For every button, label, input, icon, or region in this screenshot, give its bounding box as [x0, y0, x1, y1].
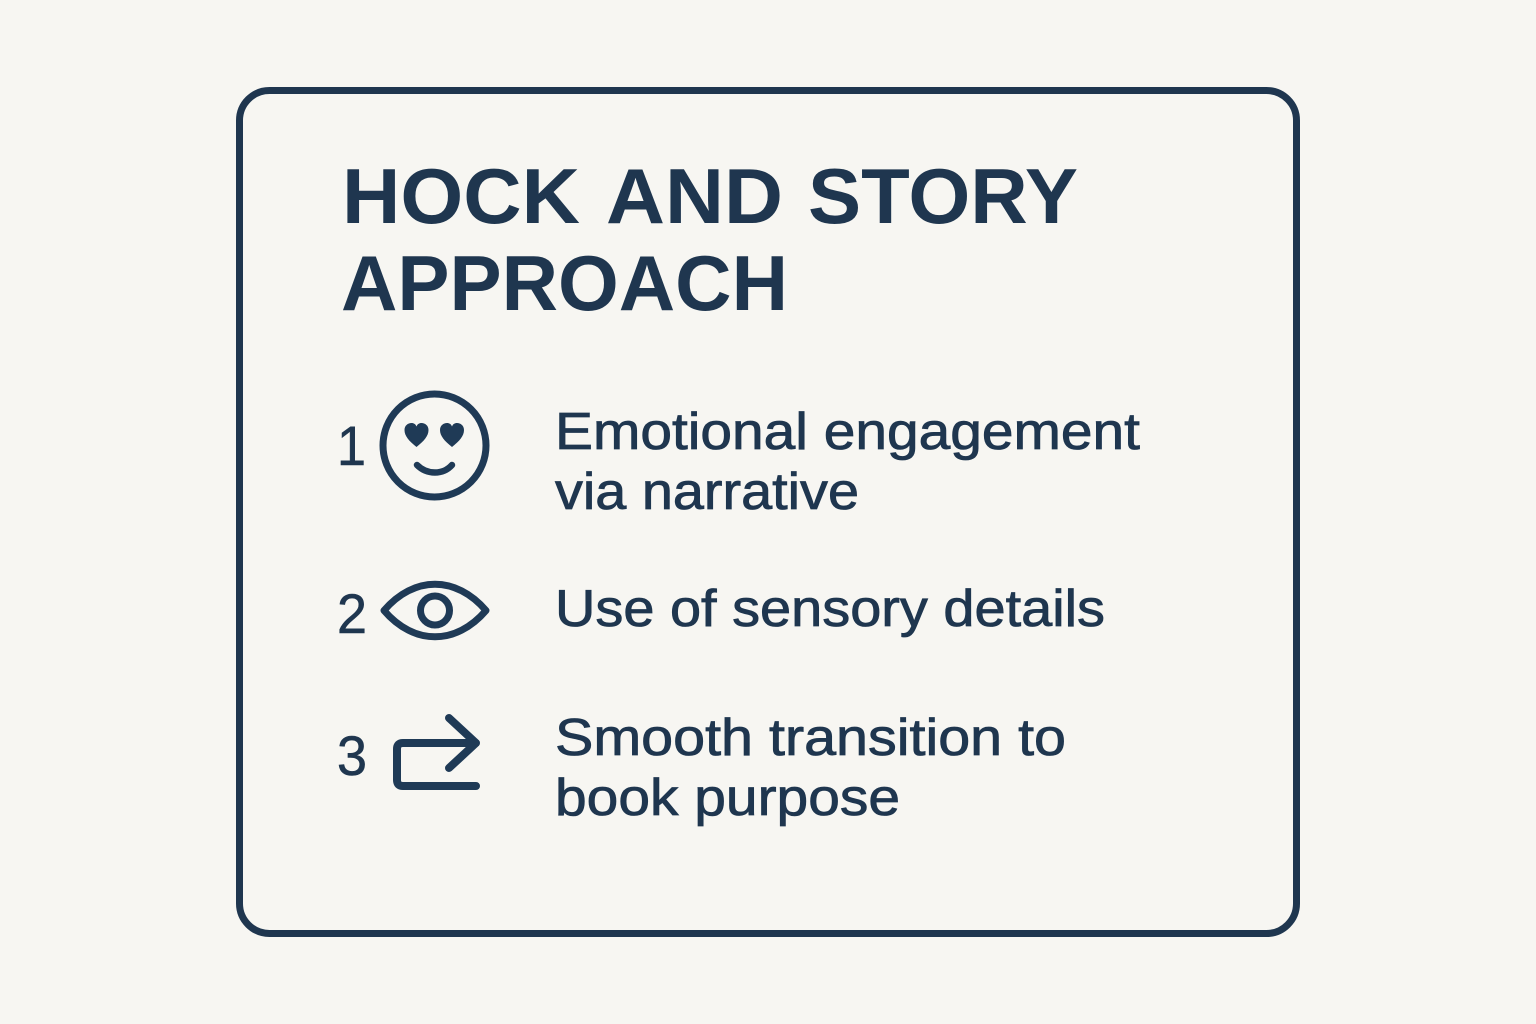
icon: eye: [384, 584, 486, 637]
title: STORY: [808, 152, 1078, 240]
number 1: 1: [337, 414, 366, 477]
number 3: 3: [337, 724, 367, 787]
panel: card: [240, 90, 1296, 934]
title: HOCK: [342, 152, 580, 240]
title: AND: [606, 152, 783, 240]
text: item 3: Smooth transition to: [555, 709, 1066, 767]
icon: arrow transition: [397, 718, 476, 786]
text: item 2: Use of sensory details: [555, 580, 1105, 638]
title: [341, 152, 1078, 327]
icon: smiling face with heart eyes: [383, 394, 486, 497]
number 2: 2: [337, 582, 367, 645]
title: APPROACH: [341, 239, 788, 327]
text: item 1: [555, 403, 1141, 521]
text: item 1: Emotional engagement: [555, 403, 1141, 461]
text: item 1: via narrative: [555, 463, 859, 521]
text: item 3: [555, 709, 1066, 827]
text: item 3: book purpose: [555, 769, 900, 827]
